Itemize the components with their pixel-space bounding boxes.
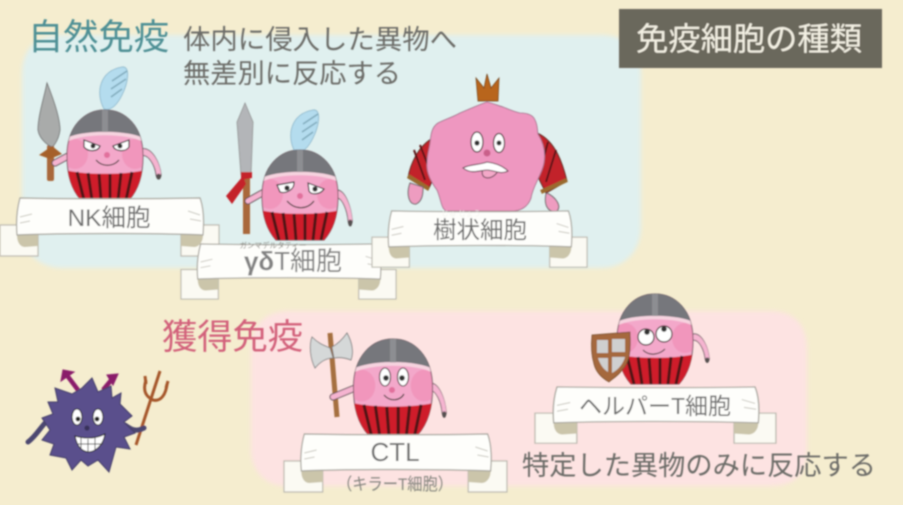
ribbon: NK cell label: NK細胞 xyxy=(67,204,151,232)
character: CTL xyxy=(310,333,446,437)
title box xyxy=(619,9,882,68)
ribbon: dendritic cell label: じゅ じょう xyxy=(441,209,481,218)
character: pathogen xyxy=(28,370,168,472)
ribbon: NK cell label xyxy=(0,198,219,256)
panel: innate immunity area xyxy=(22,35,641,268)
character: gamma delta T cell xyxy=(226,103,352,242)
sleeves xyxy=(408,133,567,212)
icon: axe xyxy=(310,333,352,417)
face xyxy=(84,140,129,165)
face xyxy=(380,368,408,400)
ribbon: gamma delta T cell label: ガンマデルタティー xyxy=(239,240,307,250)
text block: innate immunity description xyxy=(183,25,457,89)
ribbon: dendritic cell label: 樹状細胞 xyxy=(433,217,527,243)
text block: acquired immunity description: 特定した異物のみに反応する xyxy=(522,451,876,481)
title box: 免疫細胞の種類 xyxy=(636,21,862,57)
ribbon: gamma delta T cell label: γδT細胞 xyxy=(244,246,342,276)
character: NK cell xyxy=(38,67,161,202)
ribbon: dendritic cell label xyxy=(372,209,587,267)
icon: horns xyxy=(61,370,118,390)
icon: trident xyxy=(136,371,168,445)
face xyxy=(72,409,105,452)
ribbon: helper T cell label: ヘルパーT細胞 xyxy=(579,393,731,419)
ribbon: gamma delta T cell label xyxy=(181,240,396,299)
text block: innate immunity description: 無差別に反応する xyxy=(183,59,401,89)
cell body xyxy=(427,102,545,211)
panel: acquired immunity area xyxy=(251,311,807,486)
ribbon: CTL label xyxy=(284,434,507,494)
heading: innate immunity: 自然免疫 xyxy=(28,17,169,57)
icon: sword xyxy=(226,103,253,234)
face xyxy=(277,182,324,208)
character: helper T cell xyxy=(591,292,709,386)
ribbon: helper T cell label xyxy=(535,387,776,443)
icon: shield xyxy=(591,332,630,382)
icon: crown xyxy=(476,74,499,101)
spiky body xyxy=(42,378,135,472)
face xyxy=(463,132,508,178)
arms xyxy=(28,422,144,442)
character: dendritic cell xyxy=(408,74,567,212)
ribbon: CTL label: （キラーT細胞） xyxy=(337,475,453,494)
heading: acquired immunity: 獲得免疫 xyxy=(162,318,303,357)
ribbon: CTL label: CTL xyxy=(370,437,420,467)
icon: spear xyxy=(38,83,62,181)
text block: innate immunity description: 体内に侵入した異物へ xyxy=(183,25,457,55)
face xyxy=(638,326,672,354)
